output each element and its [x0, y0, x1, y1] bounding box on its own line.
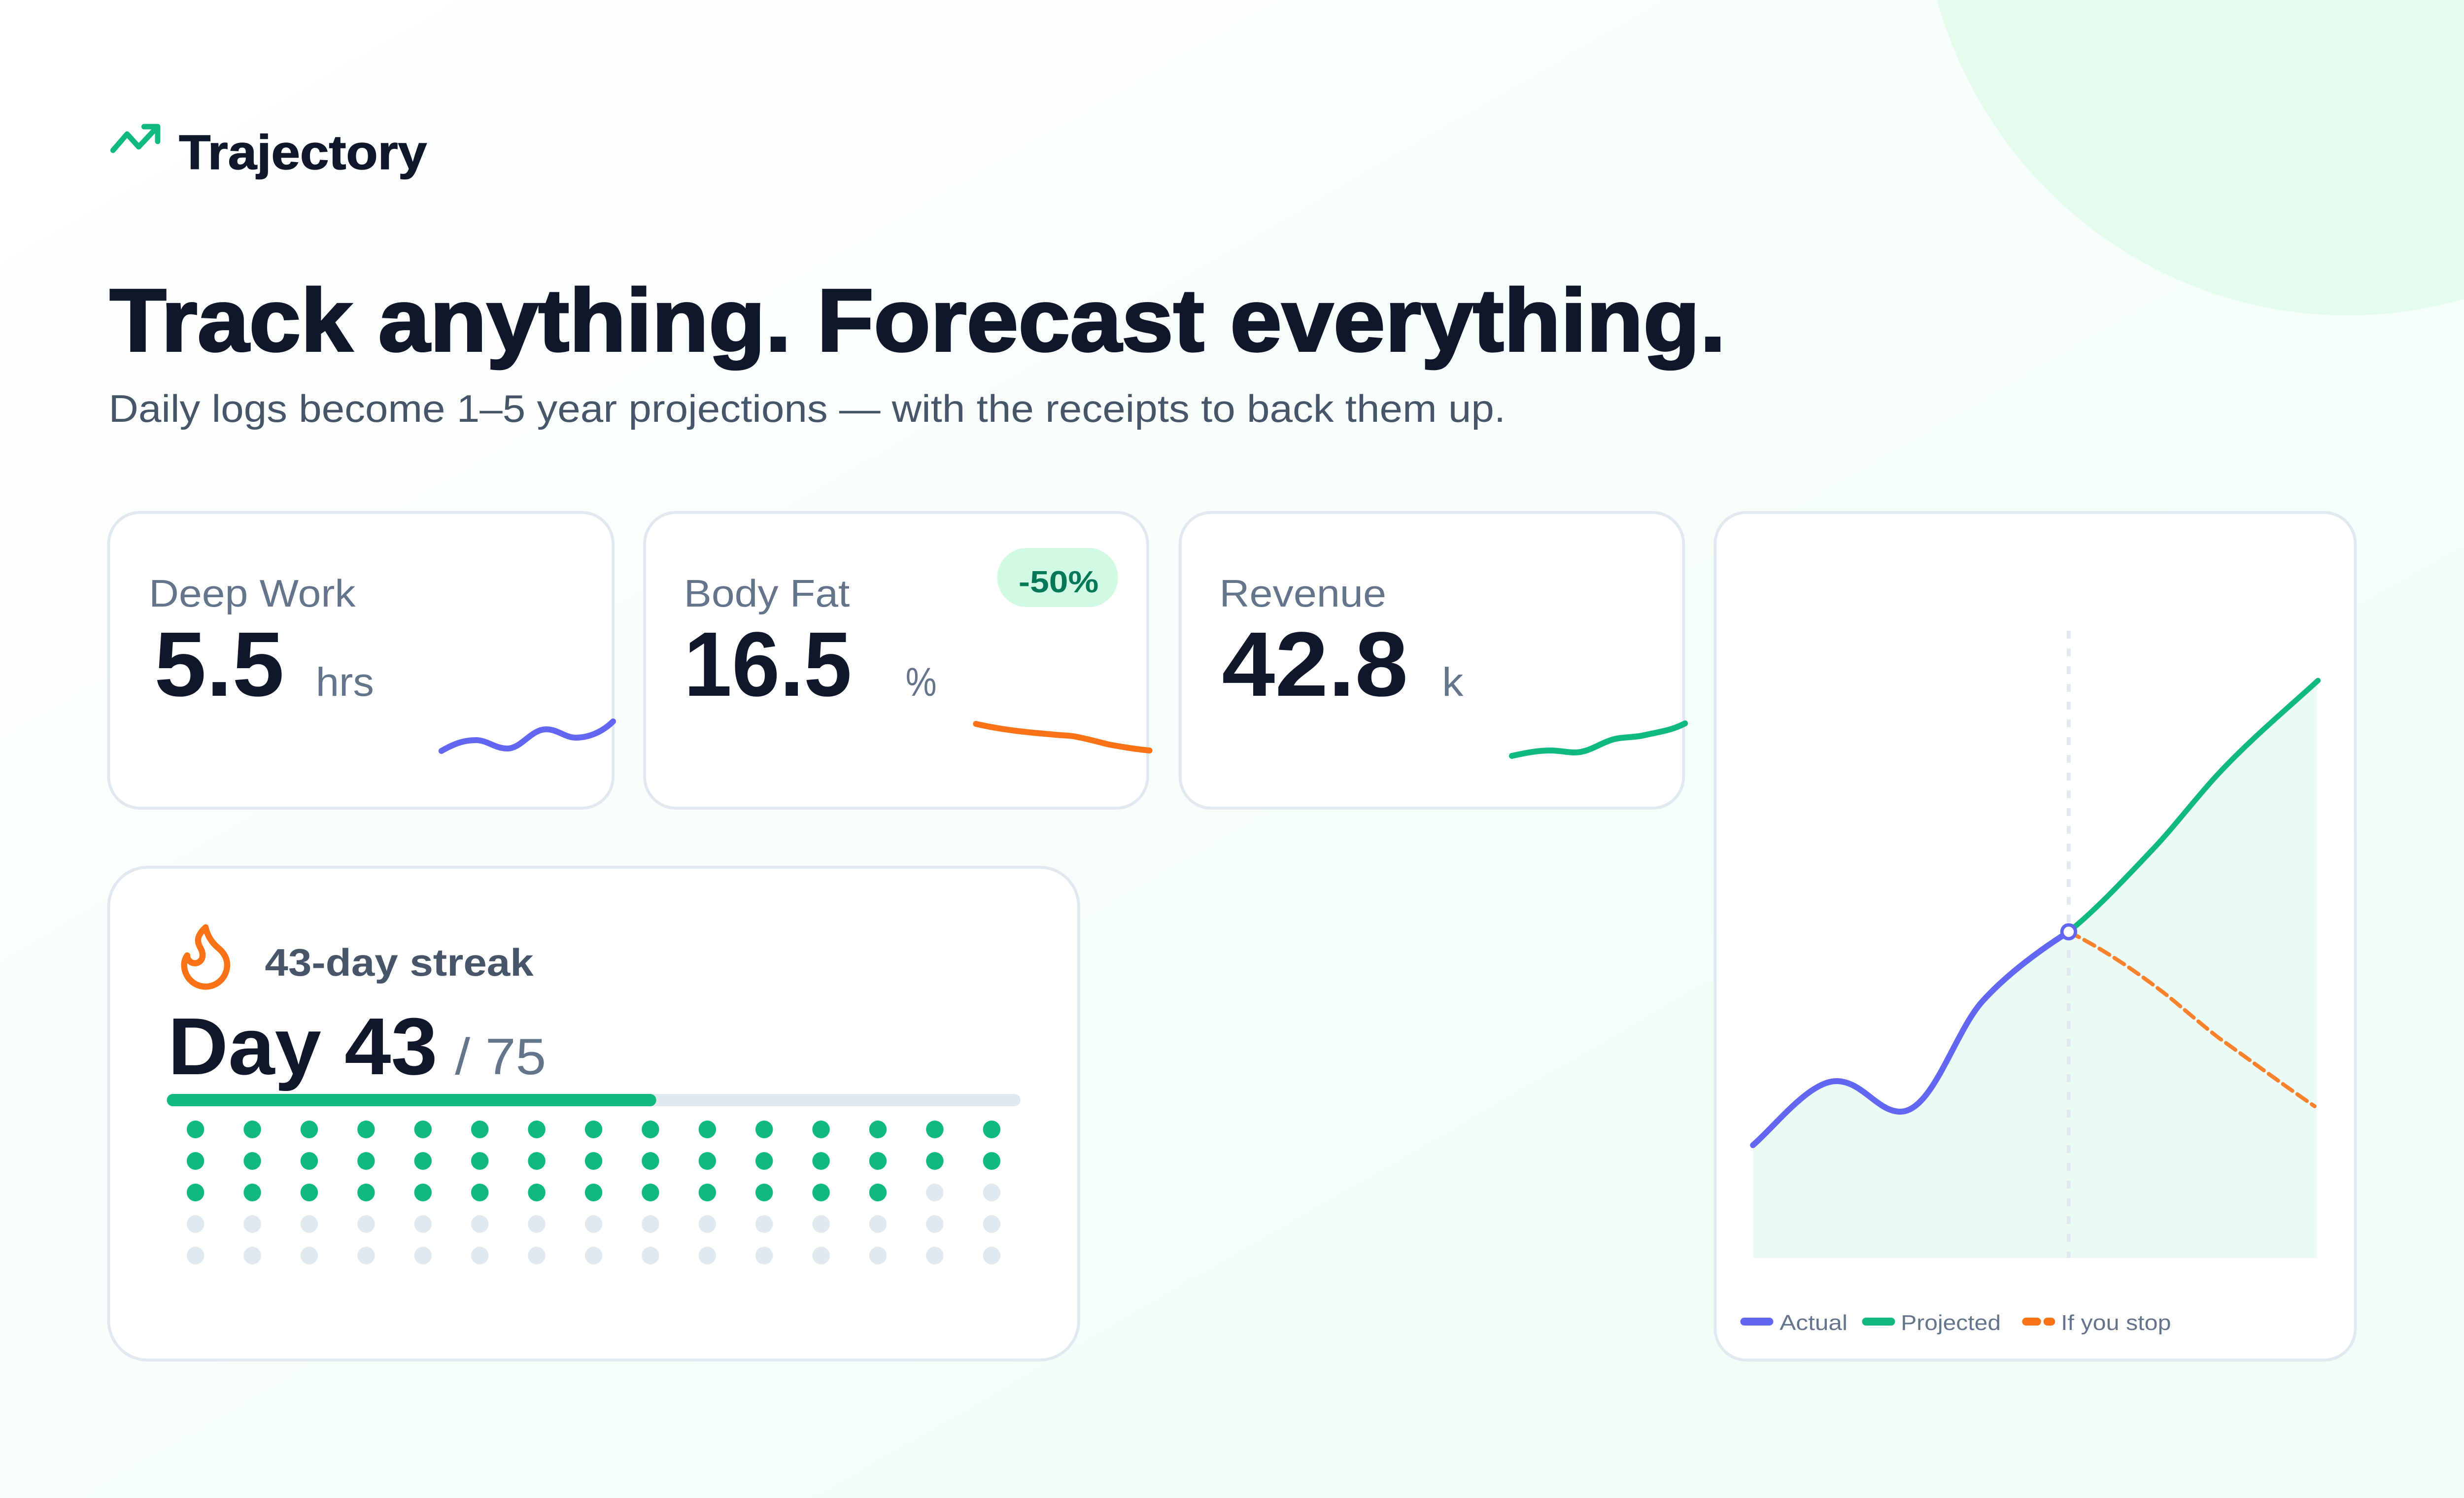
logo [113, 125, 427, 179]
value: 5.5 [154, 613, 284, 715]
legend: If you stop [2061, 1311, 2171, 1335]
sparkline [1512, 723, 1685, 756]
panel: deep work [108, 512, 613, 808]
legend: Projected [1901, 1311, 2001, 1335]
title: Track anything. Forecast everything. [109, 271, 1726, 370]
day count: Day 43 [168, 1002, 438, 1091]
decorative circle [1921, 0, 2464, 315]
badge: -50% [1019, 565, 1098, 599]
unit: % [906, 659, 937, 705]
progress bar [167, 1094, 1021, 1106]
badge [997, 548, 1118, 607]
sparkline [976, 724, 1150, 750]
subtitle: Daily logs become 1–5 year projections — with the receipts to back them up. [108, 387, 1506, 430]
unit: k [1442, 659, 1464, 705]
panel: forecast chart [1715, 512, 2356, 1360]
icon: flame [184, 927, 227, 987]
actual line [1753, 932, 2069, 1145]
panel: revenue [1180, 512, 1685, 808]
today marker dot [2062, 925, 2076, 939]
brand name: Trajectory [179, 125, 427, 179]
label: Deep Work [149, 572, 356, 615]
if you stop line [2069, 932, 2315, 1106]
value: 16.5 [684, 613, 852, 715]
chart area fill [1753, 681, 2317, 1258]
legend: Actual [1780, 1311, 1848, 1335]
unit: hrs [316, 659, 374, 705]
panel: body fat [645, 512, 1150, 808]
legend [1740, 1311, 2171, 1335]
icon: trend arrow [113, 127, 158, 150]
value: 42.8 [1222, 613, 1408, 715]
today marker line [2067, 631, 2071, 1258]
panel: streak [108, 867, 1079, 1360]
sparkline [442, 721, 613, 751]
projected line [2069, 681, 2318, 932]
label: Revenue [1219, 572, 1386, 615]
dot grid [187, 1121, 1000, 1264]
day total: / 75 [455, 1028, 546, 1085]
label: Body Fat [684, 572, 850, 615]
streak label: 43-day streak [265, 941, 534, 984]
